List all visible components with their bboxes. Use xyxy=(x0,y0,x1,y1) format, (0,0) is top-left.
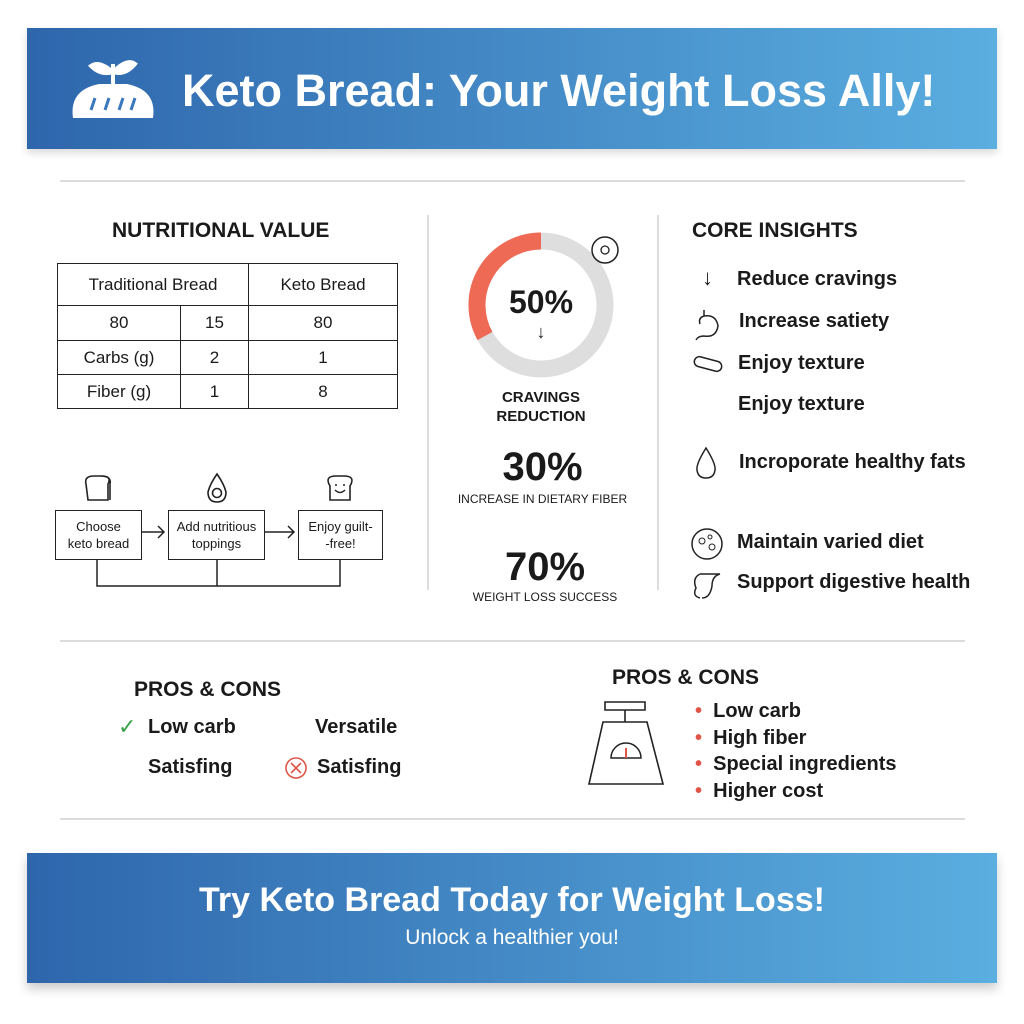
heading: nutritional value: NUTRITIONAL VALUE xyxy=(112,219,329,242)
header banner xyxy=(27,28,997,149)
nutrition table: 80 xyxy=(110,313,128,332)
insights list: ↓ xyxy=(702,265,713,290)
footer banner: Try Keto Bread Today for Weight Loss! xyxy=(199,881,825,919)
insights list xyxy=(691,265,970,599)
stat: 30% xyxy=(458,445,627,506)
icon: bread with sprout xyxy=(72,60,154,118)
flow diagram xyxy=(55,472,383,587)
box: choose: Choose xyxy=(76,519,121,534)
box: choose: keto bread xyxy=(68,536,129,551)
nutrition table: 15 xyxy=(205,313,224,332)
nutrition table: 80 xyxy=(314,313,332,332)
insights list: Enjoy texture xyxy=(738,393,865,415)
insights list: Increase satiety xyxy=(739,310,889,332)
box: choose xyxy=(55,510,142,560)
insights list: Incroporate healthy fats xyxy=(739,451,966,473)
icon: toast xyxy=(84,475,112,501)
pros & cons left: ✓ xyxy=(118,714,136,739)
stat: 30%: INCREASE IN DIETARY FIBER xyxy=(458,492,627,506)
stat: 30%: 30% xyxy=(502,445,583,489)
donut chart: cravings reduction: REDUCTION xyxy=(496,408,586,425)
stat: 70%: WEIGHT LOSS SUCCESS xyxy=(473,590,617,604)
icon: avocado xyxy=(207,472,227,503)
nutrition table: Traditional Bread xyxy=(89,274,217,294)
pros & cons right with scale icon xyxy=(588,666,897,802)
box: toppings: toppings xyxy=(192,536,241,551)
pros & cons left xyxy=(118,678,401,779)
footer banner xyxy=(27,853,997,983)
insights list: Enjoy texture xyxy=(738,352,865,374)
nutrition table: Keto Bread xyxy=(280,274,366,294)
pros & cons left: Satisfing xyxy=(148,756,232,778)
stat: 70% xyxy=(472,545,617,604)
insights list: Reduce cravings xyxy=(737,268,897,290)
nutrition table: Fiber (g) xyxy=(87,382,151,400)
pros & cons right with scale icon: PROS & CONS xyxy=(612,666,759,689)
title: Keto Bread: Your Weight Loss Ally! xyxy=(182,65,935,116)
heading: core insights: CORE INSIGHTS xyxy=(692,219,858,242)
nutrition table: Carbs (g) xyxy=(84,348,154,366)
box: enjoy xyxy=(298,510,383,560)
pros & cons right with scale icon: • Low carb xyxy=(695,700,801,722)
pros & cons left: Low carb xyxy=(148,716,236,738)
box: toppings xyxy=(168,510,265,560)
box: enjoy: -free! xyxy=(325,536,356,551)
pros & cons left: Versatile xyxy=(315,716,397,738)
icon: smiling toast xyxy=(327,475,353,501)
pros & cons right with scale icon: • Special ingredients xyxy=(695,753,897,775)
box: toppings: Add nutritious xyxy=(177,519,256,534)
nutrition table: 2 xyxy=(210,348,219,366)
pros & cons left: Satisfing xyxy=(317,756,401,778)
nutrition table: 1 xyxy=(210,382,219,400)
pros & cons right with scale icon: • Higher cost xyxy=(695,780,823,802)
pros & cons right with scale icon: • High fiber xyxy=(695,726,806,748)
nutrition table: 8 xyxy=(318,382,328,400)
footer banner: Unlock a healthier you! xyxy=(405,926,619,949)
insights list: Maintain varied diet xyxy=(737,531,924,553)
insights list: Support digestive health xyxy=(737,571,970,593)
donut chart: cravings reduction: CRAVINGS xyxy=(502,389,580,406)
donut chart: cravings reduction: ↓ xyxy=(536,322,546,342)
donut chart: cravings reduction xyxy=(468,232,619,425)
nutrition table: 1 xyxy=(318,348,328,366)
nutrition table xyxy=(57,263,398,409)
stat: 70%: 70% xyxy=(505,545,585,589)
box: enjoy: Enjoy guilt- xyxy=(308,519,373,534)
donut chart: cravings reduction: 50% xyxy=(509,284,573,320)
pros & cons left: PROS & CONS xyxy=(134,678,281,701)
